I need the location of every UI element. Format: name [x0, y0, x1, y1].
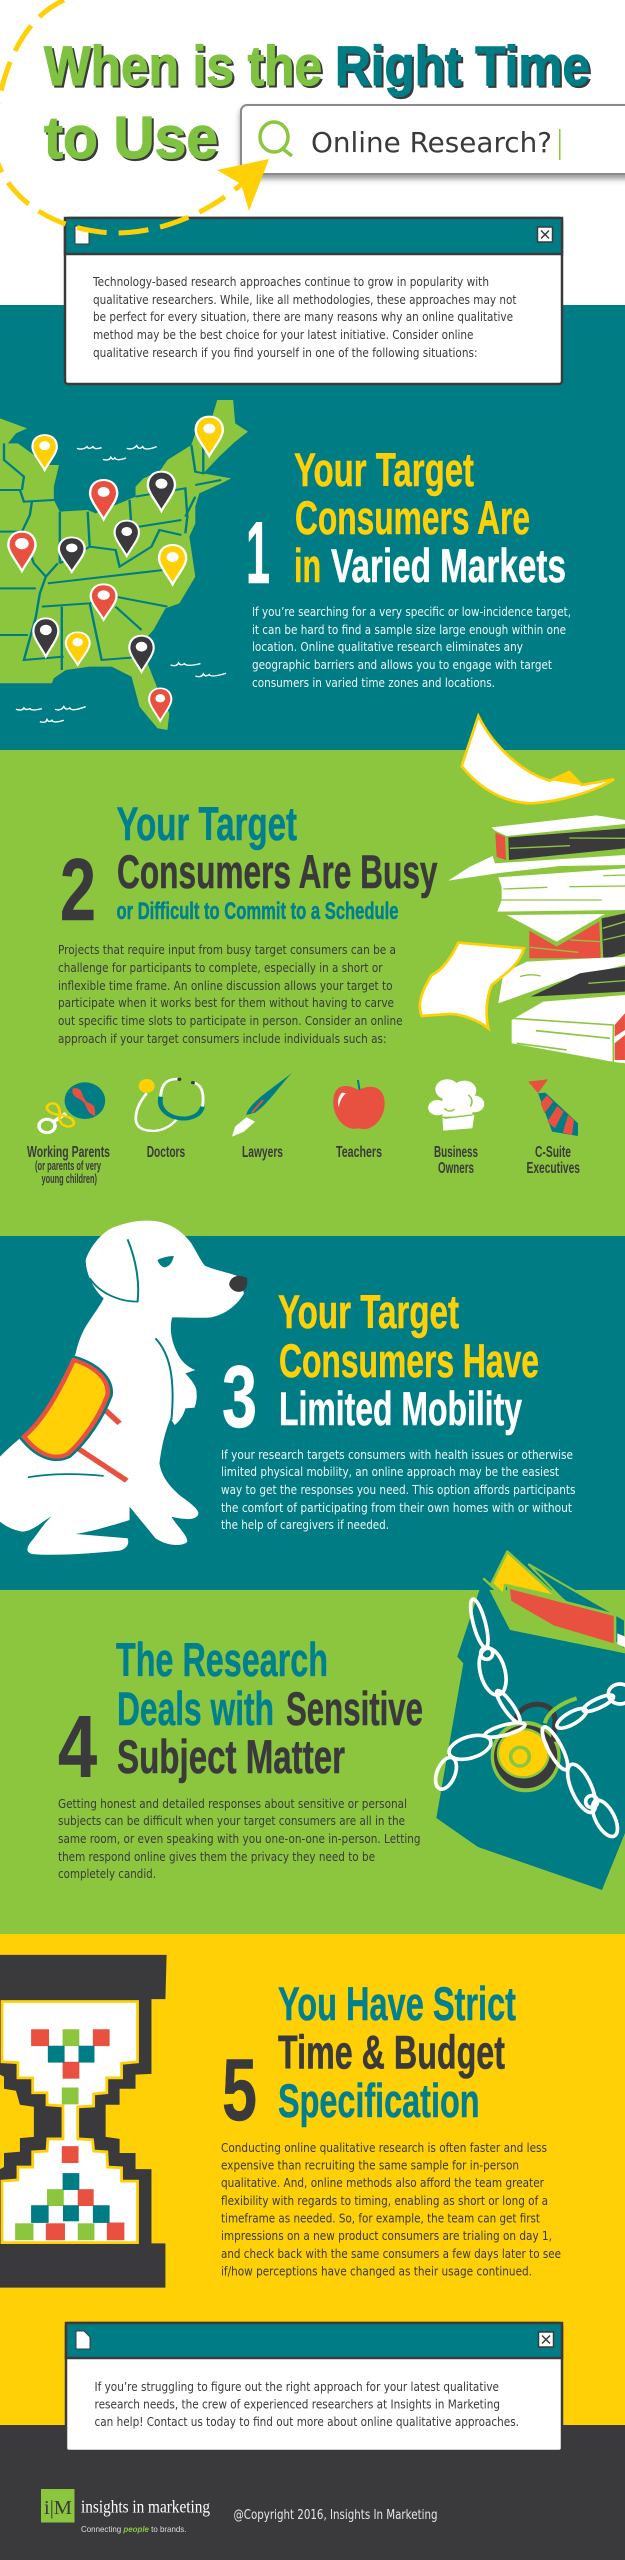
- search text: Online Research?: [311, 126, 552, 159]
- section 4 heading: The Research: [116, 1633, 328, 1686]
- role labels: young children): [42, 1172, 97, 1186]
- section 1 heading: Your Target: [294, 443, 474, 496]
- closing text: [94, 2379, 519, 2429]
- section 2 heading: or Difficult to Commit to a Schedule: [116, 898, 398, 925]
- section 1 body: If you’re searching for a very specific or low-incidence target,: [252, 604, 571, 619]
- role labels: Business: [434, 1144, 478, 1161]
- section 4 heading: Deals with: [117, 1682, 274, 1735]
- section 5 body: [221, 2140, 561, 2278]
- illustration: locked folder: [431, 1552, 625, 1890]
- section 5 number: 5: [222, 2040, 257, 2139]
- closing window: [66, 2323, 562, 2451]
- section 2 body: participate when it works best for them without having to carve: [58, 995, 394, 1010]
- section 5 heading: You Have Strict: [278, 1977, 516, 2030]
- icon: close: [538, 2332, 554, 2347]
- section 2 heading: Your Target: [116, 797, 297, 850]
- chains: [431, 1598, 625, 1840]
- section 3 number: 3: [222, 1347, 257, 1446]
- intro text: be perfect for every situation, there are many reasons why an online qualitative: [93, 309, 513, 324]
- map of eastern US: [0, 400, 248, 730]
- icon: stethoscope: [136, 1078, 203, 1131]
- section 4 body: same room, or even speaking with you one-on-one in-person. Letting: [58, 1831, 420, 1846]
- logo: Connecting people to brands.: [81, 2524, 186, 2534]
- section 5 heading: [278, 1977, 516, 2127]
- cursor: [559, 129, 560, 160]
- state lines: [0, 443, 221, 670]
- title: [44, 34, 590, 171]
- section 1 heading: [294, 443, 566, 592]
- icon: close: [538, 227, 552, 242]
- intro text: qualitative researchers. While, like all methodologies, these approaches may not: [93, 292, 517, 307]
- section 1 body: consumers in varied time zones and locations.: [252, 675, 495, 690]
- section 3 body: the help of caregivers if needed.: [221, 1517, 389, 1532]
- section 4 heading: Sensitive: [286, 1682, 423, 1735]
- section 5 body: impressions on a new product consumers are trialing on day 1,: [221, 2228, 552, 2243]
- illustration: books and papers: [420, 716, 625, 1063]
- section 3 body: the comfort of participating from their own homes with or without: [221, 1500, 572, 1515]
- role labels: Doctors: [147, 1144, 185, 1161]
- intro window: [65, 218, 562, 384]
- section 2 number: 2: [60, 840, 96, 939]
- logo: insights in marketing: [81, 2496, 210, 2516]
- map pins: [8, 417, 223, 721]
- icon: magnifier: [260, 122, 292, 156]
- icon: chef hat: [428, 1079, 484, 1131]
- section 5 heading: Time & Budget: [278, 2026, 505, 2078]
- role labels: Working Parents: [27, 1144, 110, 1161]
- section 5 body: qualitative. And, online methods also afford the team greater: [221, 2175, 545, 2190]
- intro text: method may be the best choice for your latest initiative. Consider online: [93, 327, 474, 342]
- section 1 body: [252, 604, 571, 690]
- icon: apple: [333, 1080, 385, 1129]
- search box: [241, 105, 625, 174]
- section 2 body: approach if your target consumers include individuals such as:: [58, 1031, 386, 1046]
- icon: document: [76, 2331, 90, 2349]
- role labels: Teachers: [336, 1144, 382, 1161]
- section 5 body: and check back with the same consumers a few days later to see: [221, 2246, 561, 2261]
- section 1 body: location. Online qualitative research eliminates any: [252, 639, 523, 654]
- icon: baby rattle: [39, 1082, 105, 1133]
- section 4 heading: [116, 1633, 423, 1783]
- section 4 body: subjects can be difficult when your target consumers are all in the: [58, 1813, 405, 1828]
- text: 1: [246, 503, 270, 602]
- section 3 heading: [278, 1285, 539, 1435]
- intro text: qualitative research if you find yourself in one of the following situations:: [93, 345, 478, 360]
- title: When is the: [44, 34, 322, 97]
- role labels: (or parents of very: [35, 1159, 101, 1173]
- icon: document: [75, 226, 89, 244]
- section 3 body: [221, 1447, 576, 1532]
- icons row: [39, 1073, 578, 1137]
- role labels: [27, 1144, 580, 1186]
- section 4 body: them respond online gives them the privacy they need to be: [58, 1849, 375, 1864]
- section 1 body: it can be hard to find a sample size large enough within one: [252, 622, 566, 637]
- intro text: [92, 274, 517, 360]
- section 4 body: [58, 1796, 420, 1881]
- section 5 heading: Specification: [278, 2074, 480, 2127]
- section 3 heading: Your Target: [278, 1285, 459, 1338]
- section 5 body: Conducting online qualitative research is often faster and less: [221, 2140, 547, 2155]
- section 3 body: If your research targets consumers with health issues or otherwise: [221, 1447, 573, 1462]
- section 4 body: Getting honest and detailed responses about sensitive or personal: [58, 1796, 407, 1811]
- intro text: Technology-based research approaches continue to grow in popularity with: [92, 274, 489, 289]
- copyright: @Copyright 2016, Insights In Marketing: [234, 2508, 438, 2523]
- section 2 heading: Consumers Are Busy: [117, 845, 438, 898]
- illustration: service dog: [0, 1221, 247, 1555]
- section 2 body: Projects that require input from busy target consumers can be a: [58, 942, 396, 957]
- logo: i|M: [44, 2497, 72, 2519]
- section 1 body: geographic barriers and allows you to engage with target: [252, 657, 552, 672]
- title: Right Time: [335, 34, 590, 97]
- section 5 body: timeframe as needed. So, for example, the team can get first: [221, 2210, 540, 2226]
- section 3 body: limited physical mobility, an online approach may be the easiest: [221, 1464, 559, 1479]
- section 1 heading: in: [294, 539, 321, 592]
- role labels: C-Suite: [535, 1144, 571, 1161]
- closing text: can help! Contact us today to find out more about online qualitative approaches.: [94, 2414, 519, 2429]
- section 5 body: expensive than recruiting the same sample for in-person: [221, 2158, 519, 2172]
- illustration: hourglass: [0, 1955, 167, 2288]
- section 2 body: inflexible time frame. An online discussion allows your target to: [58, 978, 392, 993]
- role labels: Owners: [438, 1160, 474, 1177]
- section 2 body: challenge for participants to complete, especially in a short or: [58, 960, 383, 975]
- waves: [16, 446, 226, 722]
- section 4 number: 4: [58, 1697, 97, 1796]
- section 2 heading: [116, 797, 438, 925]
- title: to Use: [44, 105, 218, 171]
- section 4 body: completely candid.: [58, 1866, 156, 1881]
- section 5 body: flexibility with regards to timing, enabling as short or long of a: [221, 2193, 548, 2208]
- icon: fountain pen: [232, 1073, 292, 1137]
- role labels: Executives: [526, 1160, 580, 1177]
- icon: necktie: [528, 1079, 578, 1136]
- section 2 body: [58, 942, 402, 1046]
- role labels: Lawyers: [242, 1144, 283, 1161]
- logo: [41, 2489, 210, 2534]
- section 2 body: out specific time slots to participate in person. Consider an online: [58, 1013, 402, 1028]
- closing text: If you’re struggling to figure out the right approach for your latest qualitative: [94, 2379, 499, 2394]
- closing text: research needs, the crew of experienced researchers at Insights in Marketing: [94, 2396, 500, 2412]
- dashed arrow: [0, 0, 269, 233]
- section 5 body: if/how perceptions have changed as their usage continued.: [221, 2264, 532, 2278]
- section 4 heading: Subject Matter: [117, 1730, 345, 1783]
